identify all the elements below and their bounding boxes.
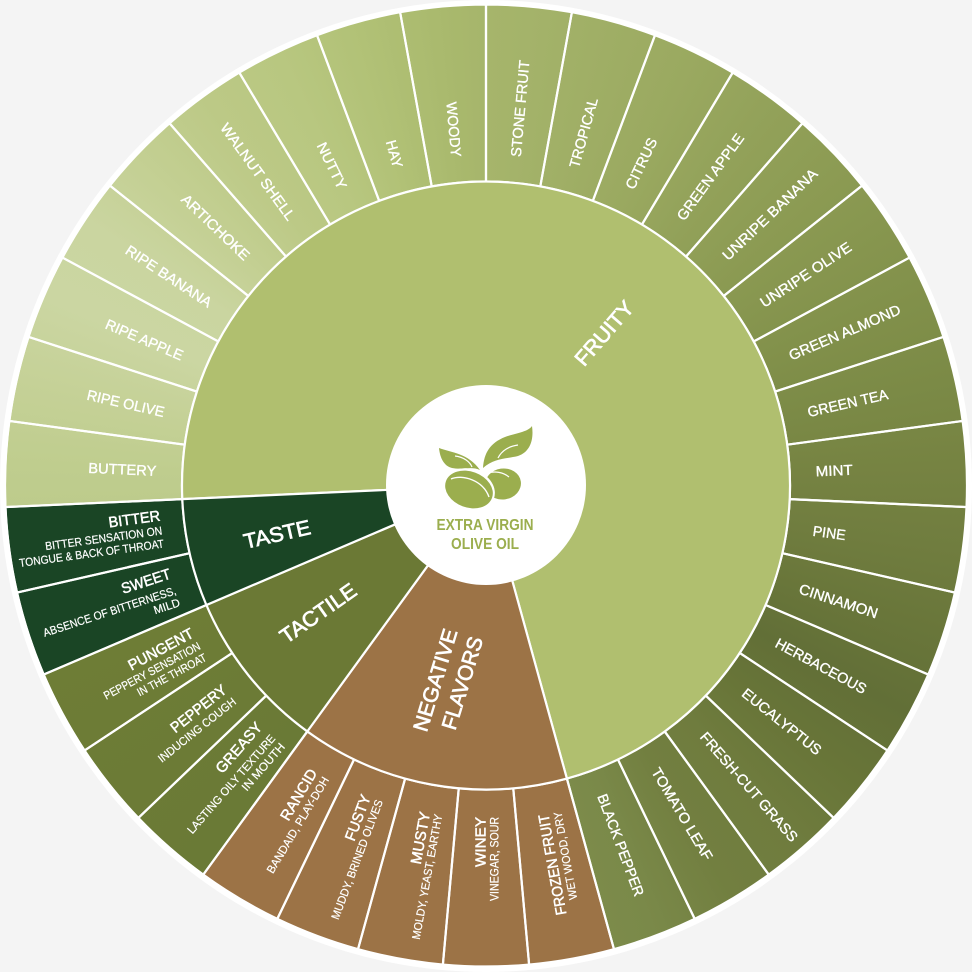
segment: pine: PINE <box>812 524 847 544</box>
segment: eucalyptus <box>688 650 887 822</box>
segment: artichoke <box>110 118 306 299</box>
segment: eucalyptus: EUCALYPTUS <box>738 686 824 759</box>
segment: tomato leaf <box>592 727 769 925</box>
segment: fusty: MUDDY, BRINED OLIVES <box>330 798 386 921</box>
segment: ripe banana <box>62 182 263 344</box>
center circle <box>386 385 586 585</box>
segment: citrus <box>591 35 735 236</box>
segment: buttery <box>2 413 187 507</box>
segment: musty: MOLDY, YEAST, EARTHY <box>411 813 445 940</box>
center title: EXTRA VIRGIN <box>436 517 534 534</box>
category: tactile: TACTILE <box>276 579 361 648</box>
category: taste <box>182 486 486 605</box>
segment: black pepper <box>538 755 695 956</box>
segment: unripe olive: UNRIPE OLIVE <box>758 239 855 311</box>
segment: walnut shell <box>170 67 354 260</box>
segment: walnut shell: WALNUT SHELL <box>216 121 298 224</box>
segment: tomato leaf: TOMATO LEAF <box>647 765 715 864</box>
segment: ripe olive <box>9 336 201 445</box>
segment: mint <box>782 421 972 530</box>
segment: pine <box>781 499 967 593</box>
segment: woody: WOODY <box>442 101 463 158</box>
segment: artichoke: ARTICHOKE <box>177 192 252 264</box>
segment: fusty <box>275 751 406 949</box>
segment: unripe olive <box>720 186 916 366</box>
segment: ripe apple <box>29 255 228 393</box>
segment: green apple <box>639 73 806 273</box>
segment: greasy: IN MOUTH <box>240 741 288 794</box>
segment: green tea <box>770 337 970 475</box>
segment: hay: HAY <box>382 139 405 170</box>
segment: sweet: SWEET <box>119 566 173 598</box>
category: fruity: FRUITY <box>570 297 639 371</box>
segment: bitter: BITTER <box>107 508 161 531</box>
segment: greasy <box>134 677 310 875</box>
segment: citrus: CITRUS <box>623 136 661 192</box>
segment: black pepper: BLACK PEPPER <box>593 792 646 899</box>
segment: sweet <box>10 524 211 675</box>
segment: fresh-cut grass: FRESH-CUT GRASS <box>696 730 800 846</box>
segment: pungent: PEPPERY SENSATION <box>102 641 203 703</box>
segment: unripe banana: UNRIPE BANANA <box>720 166 821 264</box>
segment: unripe banana <box>683 123 867 317</box>
segment: winey: WINEY <box>472 817 489 867</box>
segment: winey: VINEGAR, SOUR <box>489 817 501 901</box>
segment: nutty: NUTTY <box>313 140 349 192</box>
segment: hay <box>317 5 461 205</box>
segment: fresh-cut grass <box>643 692 834 880</box>
segment: fusty: FUSTY <box>342 792 375 843</box>
segment: green almond <box>749 258 950 419</box>
segment: nutty <box>239 29 406 229</box>
category: negative flavors: FLAVORS <box>438 634 488 733</box>
segment: ripe olive: RIPE OLIVE <box>85 388 166 421</box>
center title: OLIVE OIL <box>451 536 519 553</box>
category: negative flavors <box>307 486 567 790</box>
segment: tropical <box>539 12 656 207</box>
segment: pungent: PUNGENT <box>125 625 197 674</box>
segment: peppery <box>79 630 270 818</box>
segment: greasy: GREASY <box>212 719 266 777</box>
segment: frozen fruit: FROZEN FRUIT <box>536 813 570 916</box>
segment: musty: MUSTY <box>408 810 434 866</box>
segment: green almond: GREEN ALMOND <box>787 302 903 364</box>
segment: herbaceous <box>727 603 928 754</box>
segment: cinnamon <box>758 552 955 676</box>
segment: ripe banana: RIPE BANANA <box>122 243 215 312</box>
segment: herbaceous: HERBACEOUS <box>772 636 869 698</box>
segment: frozen fruit <box>483 774 614 972</box>
segment: bitter: BITTER SENSATION ON <box>44 525 163 553</box>
segment: rancid: BANDAID, PLAY-DOH <box>265 775 332 876</box>
segment: mint: MINT <box>815 463 853 480</box>
segment: buttery: BUTTERY <box>88 461 157 480</box>
segment: peppery: INDUCING COUGH <box>156 696 239 765</box>
segment: bitter <box>0 468 194 593</box>
segment: greasy: LASTING OILY TEXTURE <box>186 733 278 836</box>
segment: winey <box>427 783 529 972</box>
segment: green apple: GREEN APPLE <box>674 131 748 224</box>
segment: frozen fruit: WET WOOD, DRY <box>552 810 580 900</box>
segment: rancid <box>200 718 356 919</box>
segment: stone fruit: STONE FRUIT <box>509 59 533 158</box>
segment: sweet: MILD <box>152 597 182 617</box>
segment: cinnamon: CINNAMON <box>797 582 880 622</box>
segment: pungent <box>37 579 236 750</box>
icon: olives with leaves <box>437 426 532 518</box>
center title <box>436 517 534 553</box>
segment: green tea: GREEN TEA <box>806 387 890 421</box>
category: negative flavors: NEGATIVE <box>409 626 462 734</box>
segment: rancid: RANCID <box>277 766 321 824</box>
segment: bitter: TONGUE & BACK OF THROAT <box>19 538 165 570</box>
category: taste: TASTE <box>242 516 313 554</box>
segment: stone fruit <box>486 4 572 186</box>
category: tactile <box>206 486 486 731</box>
segment: musty <box>357 776 459 965</box>
segment: pungent: IN THE THROAT <box>135 652 209 699</box>
segment: tropical: TROPICAL <box>567 96 602 170</box>
segment: ripe apple: RIPE APPLE <box>103 317 186 364</box>
segment: peppery: PEPPERY <box>167 682 230 737</box>
segment: woody <box>400 0 517 191</box>
segment: sweet: ABSENCE OF BITTERNESS, <box>42 585 178 640</box>
